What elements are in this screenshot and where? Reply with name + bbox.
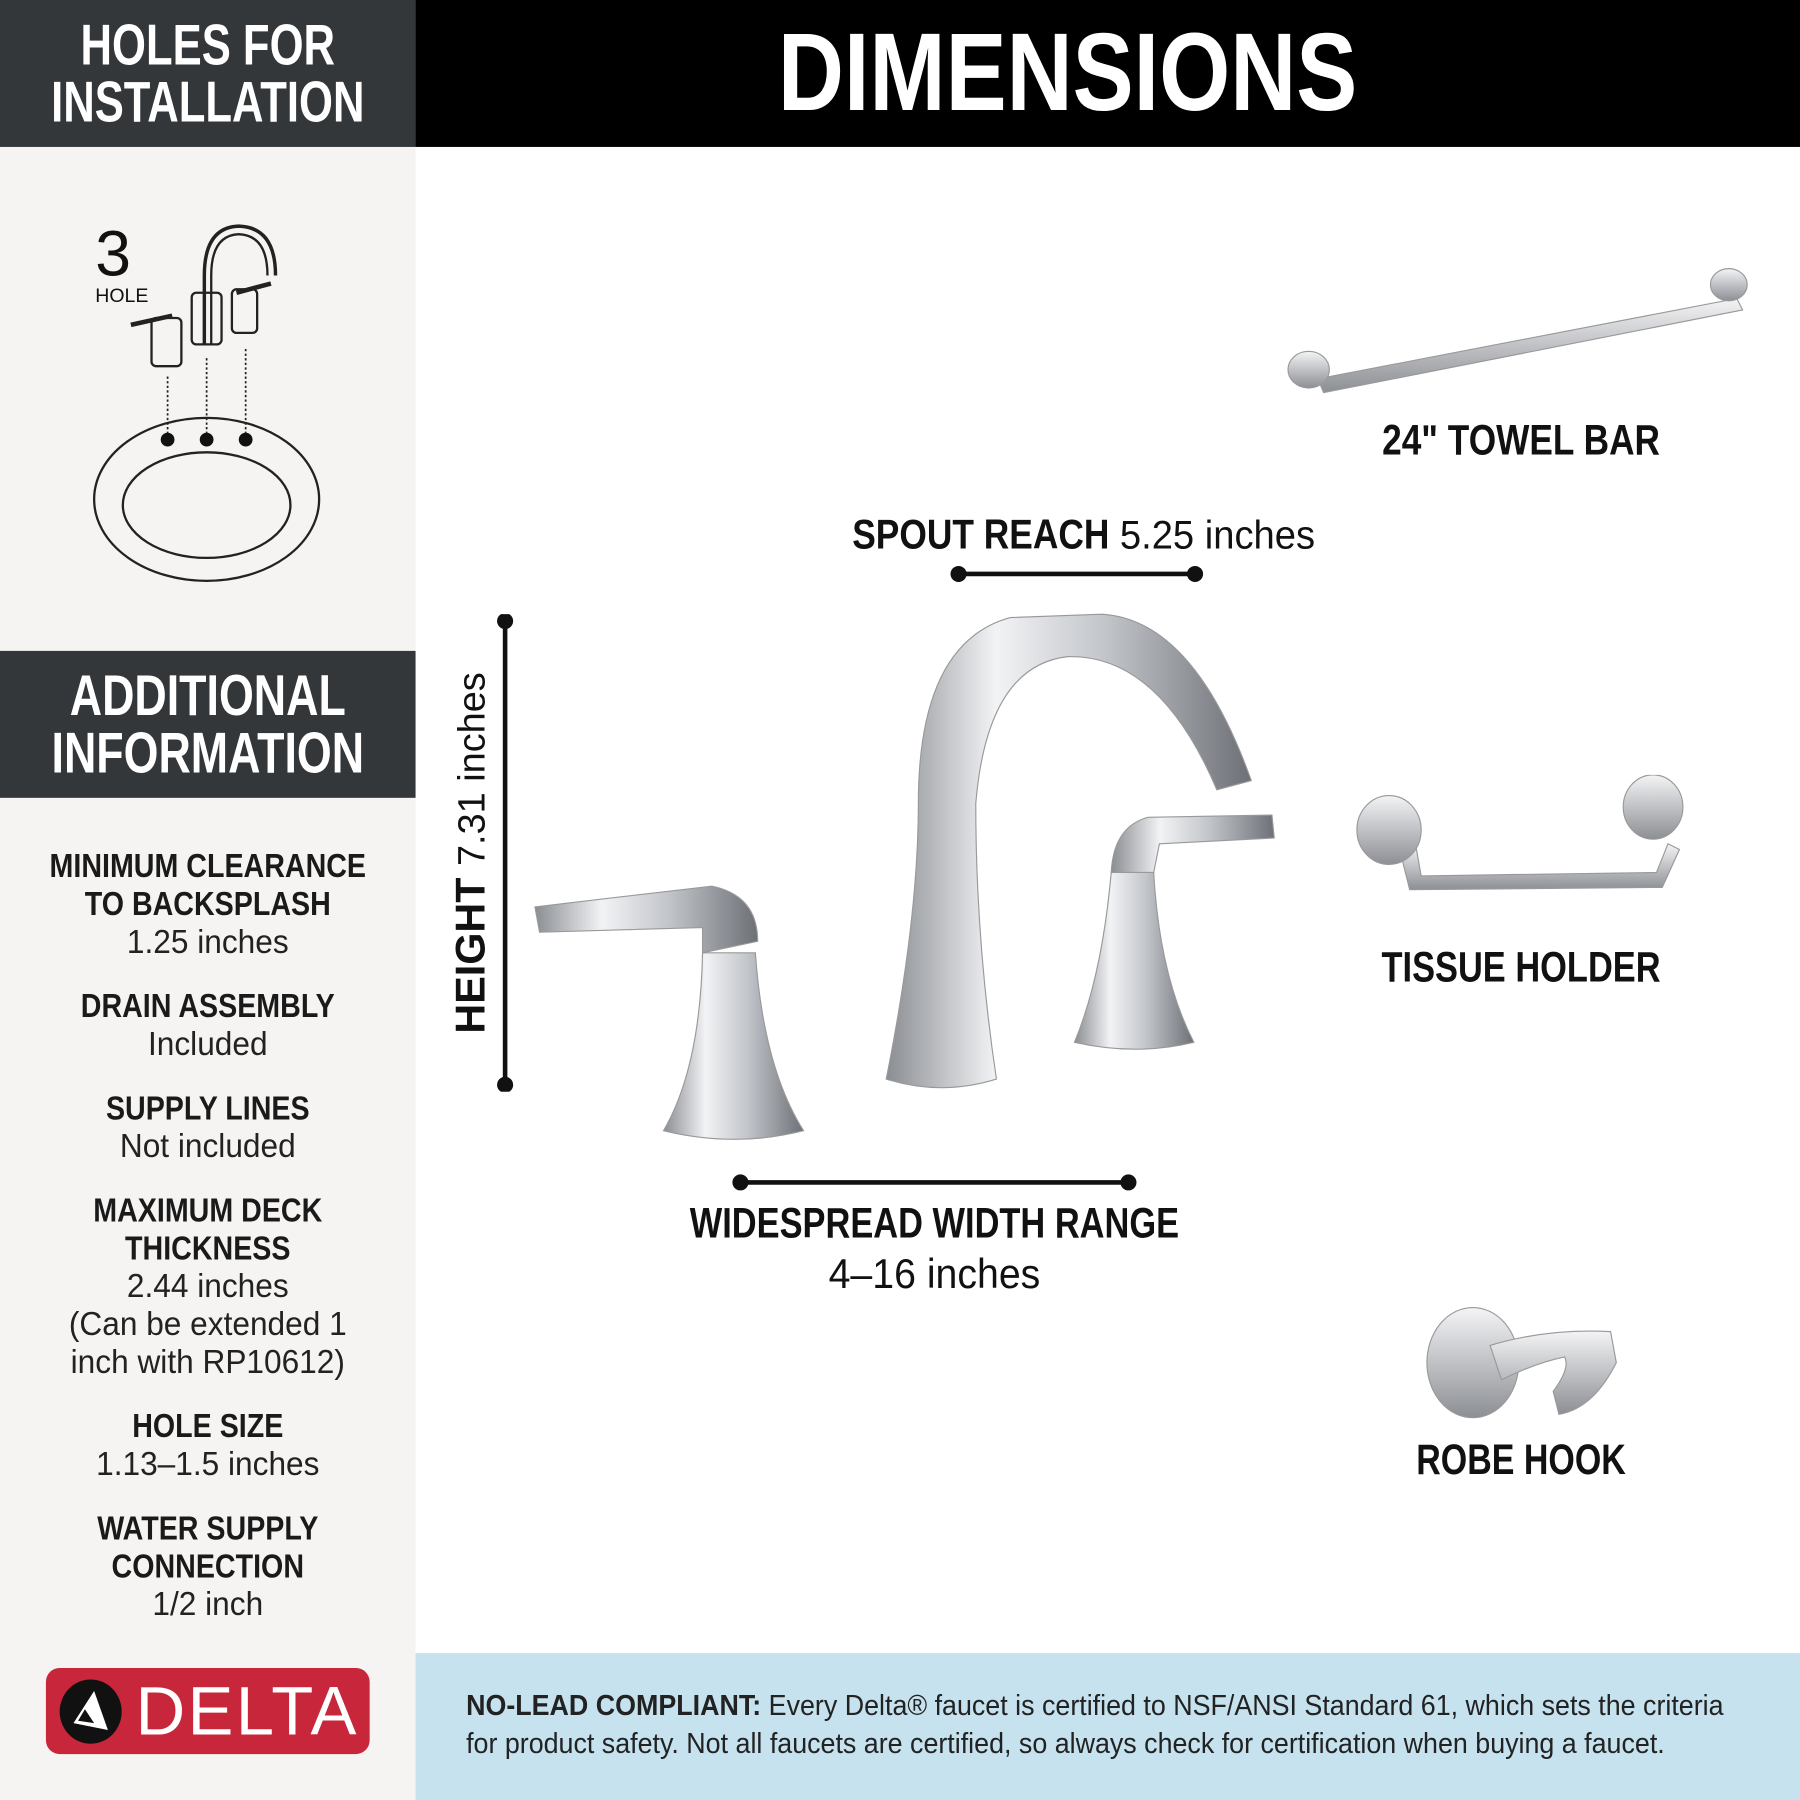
text block: specs: 1.25 inches — [127, 924, 289, 961]
icon: tissue holder — [1356, 774, 1684, 890]
label: spout reach: 5.25 inches — [1120, 513, 1315, 558]
left panel background — [0, 0, 416, 1800]
icon: towel bar — [1287, 268, 1748, 394]
dimension: widespread line — [732, 1174, 1136, 1190]
text block: specs: DRAIN ASSEMBLY — [81, 988, 335, 1025]
header: additional information: INFORMATION — [52, 721, 364, 785]
icon: robe hook — [1426, 1307, 1617, 1418]
label: tissue holder: TISSUE HOLDER — [1381, 944, 1661, 991]
logo: delta: DELTA — [135, 1673, 359, 1749]
label: spout reach — [853, 511, 1315, 558]
text block: specs: MAXIMUM DECK — [93, 1193, 322, 1229]
header: holes for installation: INSTALLATION — [51, 70, 364, 134]
icon: 3 hole sink diagram: HOLE — [95, 285, 148, 307]
title: dimensions — [416, 0, 1800, 147]
text block: specs: TO BACKSPLASH — [85, 886, 331, 923]
icon: 3 hole sink diagram — [93, 218, 320, 582]
text block: specs: CONNECTION — [112, 1549, 304, 1585]
header: additional information: ADDITIONAL — [70, 664, 346, 728]
icon: 3 hole sink diagram: 3 — [95, 218, 131, 290]
label: robe hook: ROBE HOOK — [1416, 1436, 1626, 1483]
footer: no-lead compliant — [416, 1653, 1800, 1800]
logo: delta — [46, 1668, 370, 1754]
text block: specs: SUPPLY LINES — [106, 1091, 310, 1127]
text block: specs: MINIMUM CLEARANCE — [50, 848, 366, 885]
text block: specs: HOLE SIZE — [132, 1409, 283, 1445]
header: holes for installation — [0, 0, 416, 147]
text block: specs: 1.13–1.5 inches — [96, 1446, 319, 1483]
label: spout reach: SPOUT REACH — [853, 511, 1110, 558]
header: holes for installation: HOLES FOR — [81, 13, 335, 77]
text block: specs: 1/2 inch — [152, 1586, 263, 1623]
text block: specs: Not included — [120, 1128, 296, 1165]
dimension: height — [497, 614, 514, 1092]
text block: specs: inch with RP10612) — [71, 1344, 345, 1381]
text block: specs: THICKNESS — [125, 1231, 290, 1267]
text block: specs: WATER SUPPLY — [97, 1511, 318, 1547]
header: additional information — [0, 651, 416, 798]
text block: specs: (Can be extended 1 — [69, 1306, 347, 1343]
faucet illustration — [534, 614, 1275, 1140]
title: dimensions: DIMENSIONS — [778, 11, 1357, 134]
label: height 7.31 inches: HEIGHT 7.31 inches — [447, 672, 494, 1034]
text block: specs — [50, 848, 366, 1623]
label: widespread width range: 4–16 inches — [829, 1250, 1040, 1297]
text block: specs: 2.44 inches — [127, 1268, 289, 1305]
text block: specs: Included — [148, 1026, 268, 1063]
dimension: spout reach line — [950, 566, 1204, 582]
label: towel bar: 24" TOWEL BAR — [1382, 417, 1660, 464]
footer: no-lead compliant: NO-LEAD COMPLIANT: Every Delta® faucet is certified to NSF/ANSI Standard 61, which sets the criteria for product safety. Not all faucets are certified, so always check for certification when buying a faucet. — [466, 1690, 1724, 1760]
label: widespread width range — [690, 1200, 1179, 1297]
label: widespread width range: WIDESPREAD WIDTH RANGE — [690, 1200, 1179, 1247]
